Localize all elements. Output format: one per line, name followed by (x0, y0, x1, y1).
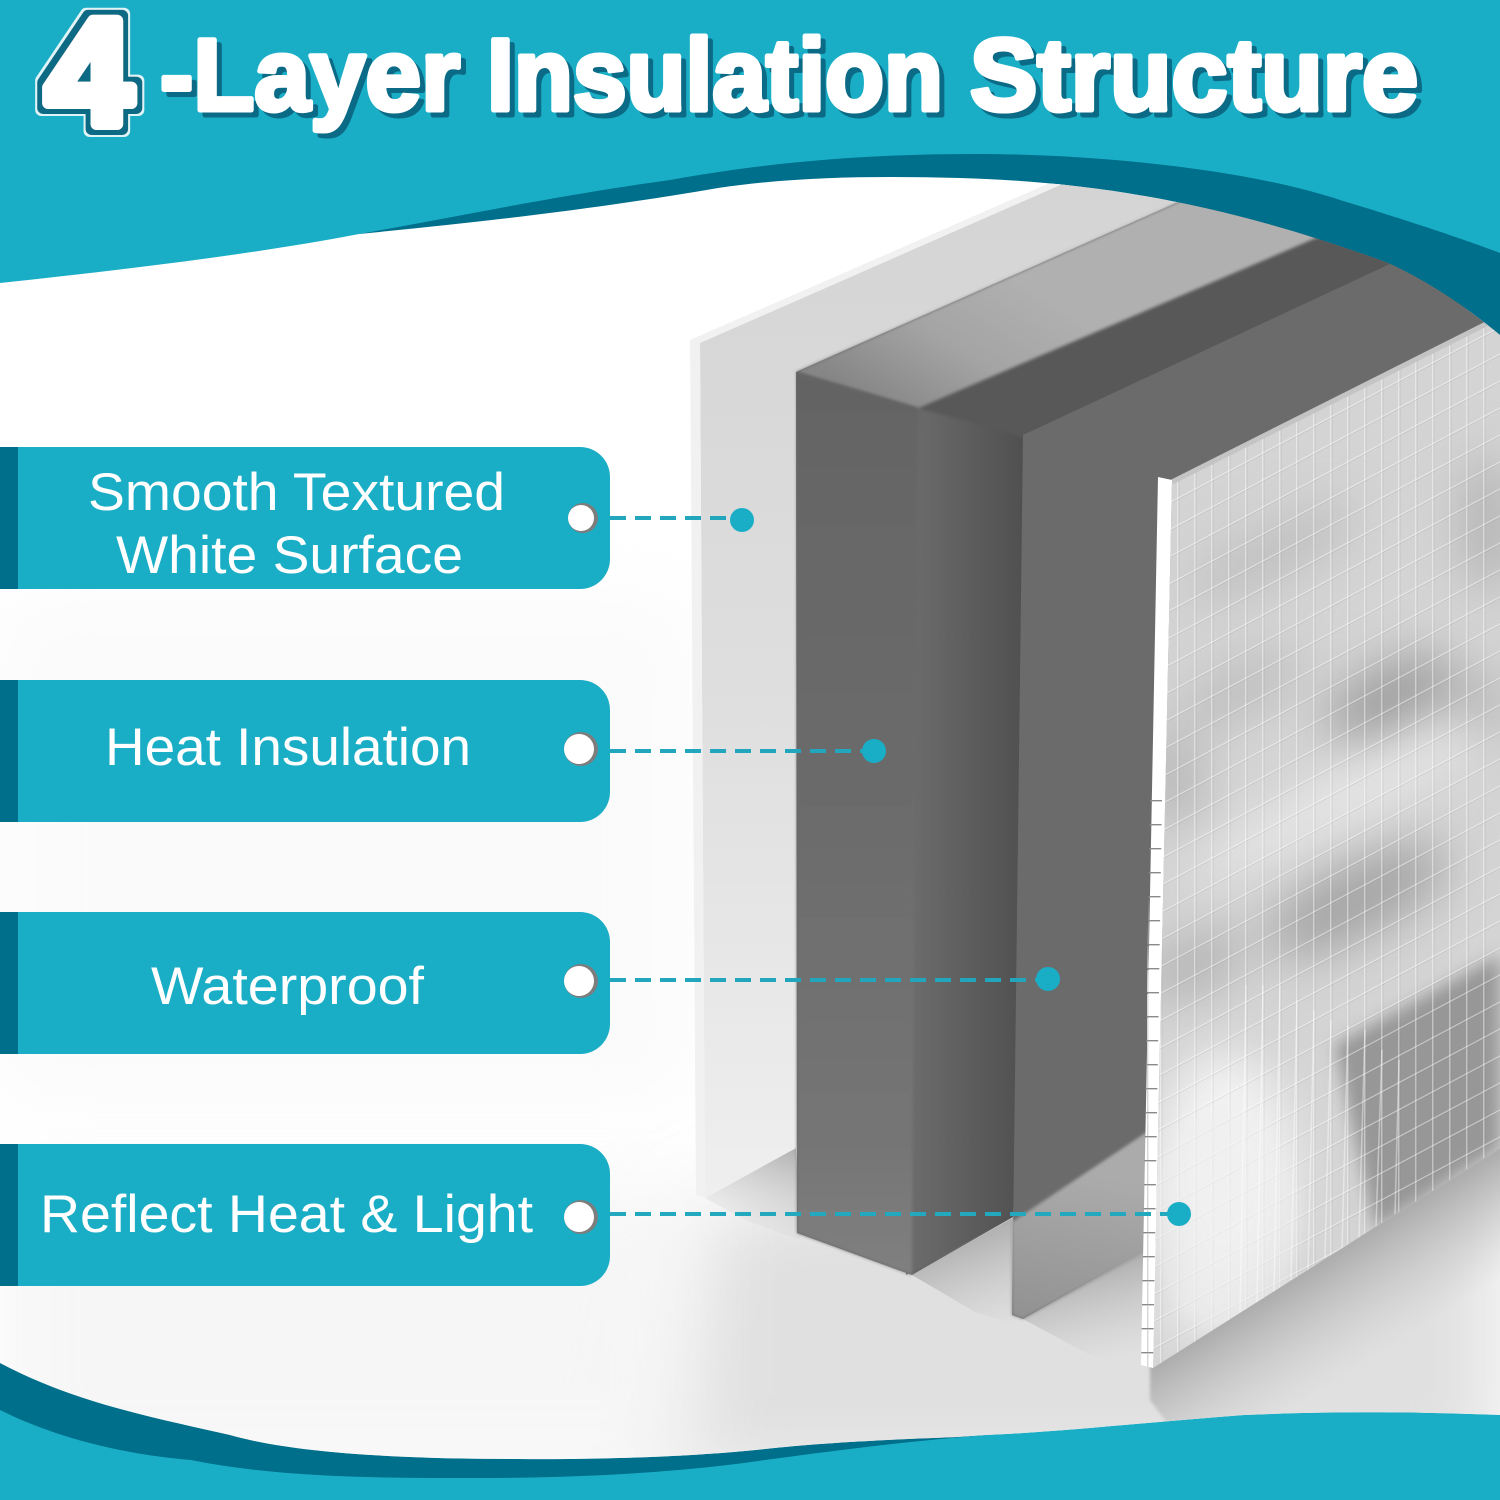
callout: smooth textured white surface: Smooth Textured (88, 463, 505, 522)
callout: smooth textured white surface: White Surface (116, 526, 463, 585)
callout: waterproof: Waterproof (151, 957, 424, 1016)
layer 4: reflective foil sheet (1134, 300, 1500, 1380)
connector: white surface (610, 508, 754, 532)
layer 1: white surface sheet (690, 170, 1320, 1198)
floor shadows (706, 1148, 797, 1228)
connector: heat insulation (610, 739, 886, 763)
top dark teal wave band (359, 154, 1500, 360)
connector: waterproof (610, 967, 1060, 991)
title word: Structure: Structure (970, 18, 1418, 132)
callout: reflect heat and light (0, 1144, 610, 1286)
callout: heat insulation (0, 680, 610, 822)
title word: -Layer: -Layer (160, 18, 460, 132)
title word: Insulation: Insulation (487, 18, 943, 132)
bottom dark teal wave band (0, 1350, 986, 1478)
floor shading (631, 1198, 1500, 1458)
callout: reflect heat and light: Reflect Heat & Light (40, 1185, 533, 1244)
layer 3: waterproof sheet (1012, 263, 1500, 1319)
layer 2: grey foam block (796, 198, 1470, 1275)
dark reflection lower right (1335, 955, 1500, 1230)
foil top edge highlight (1172, 317, 1500, 482)
callout: heat insulation: Heat Insulation (105, 718, 471, 777)
callout: smooth textured white surface (0, 447, 610, 589)
connector: reflect heat and light (610, 1202, 1191, 1226)
title (160, 18, 1418, 132)
strong vertical mesh lines (1240, 985, 1399, 1312)
callout: waterproof (0, 912, 610, 1054)
